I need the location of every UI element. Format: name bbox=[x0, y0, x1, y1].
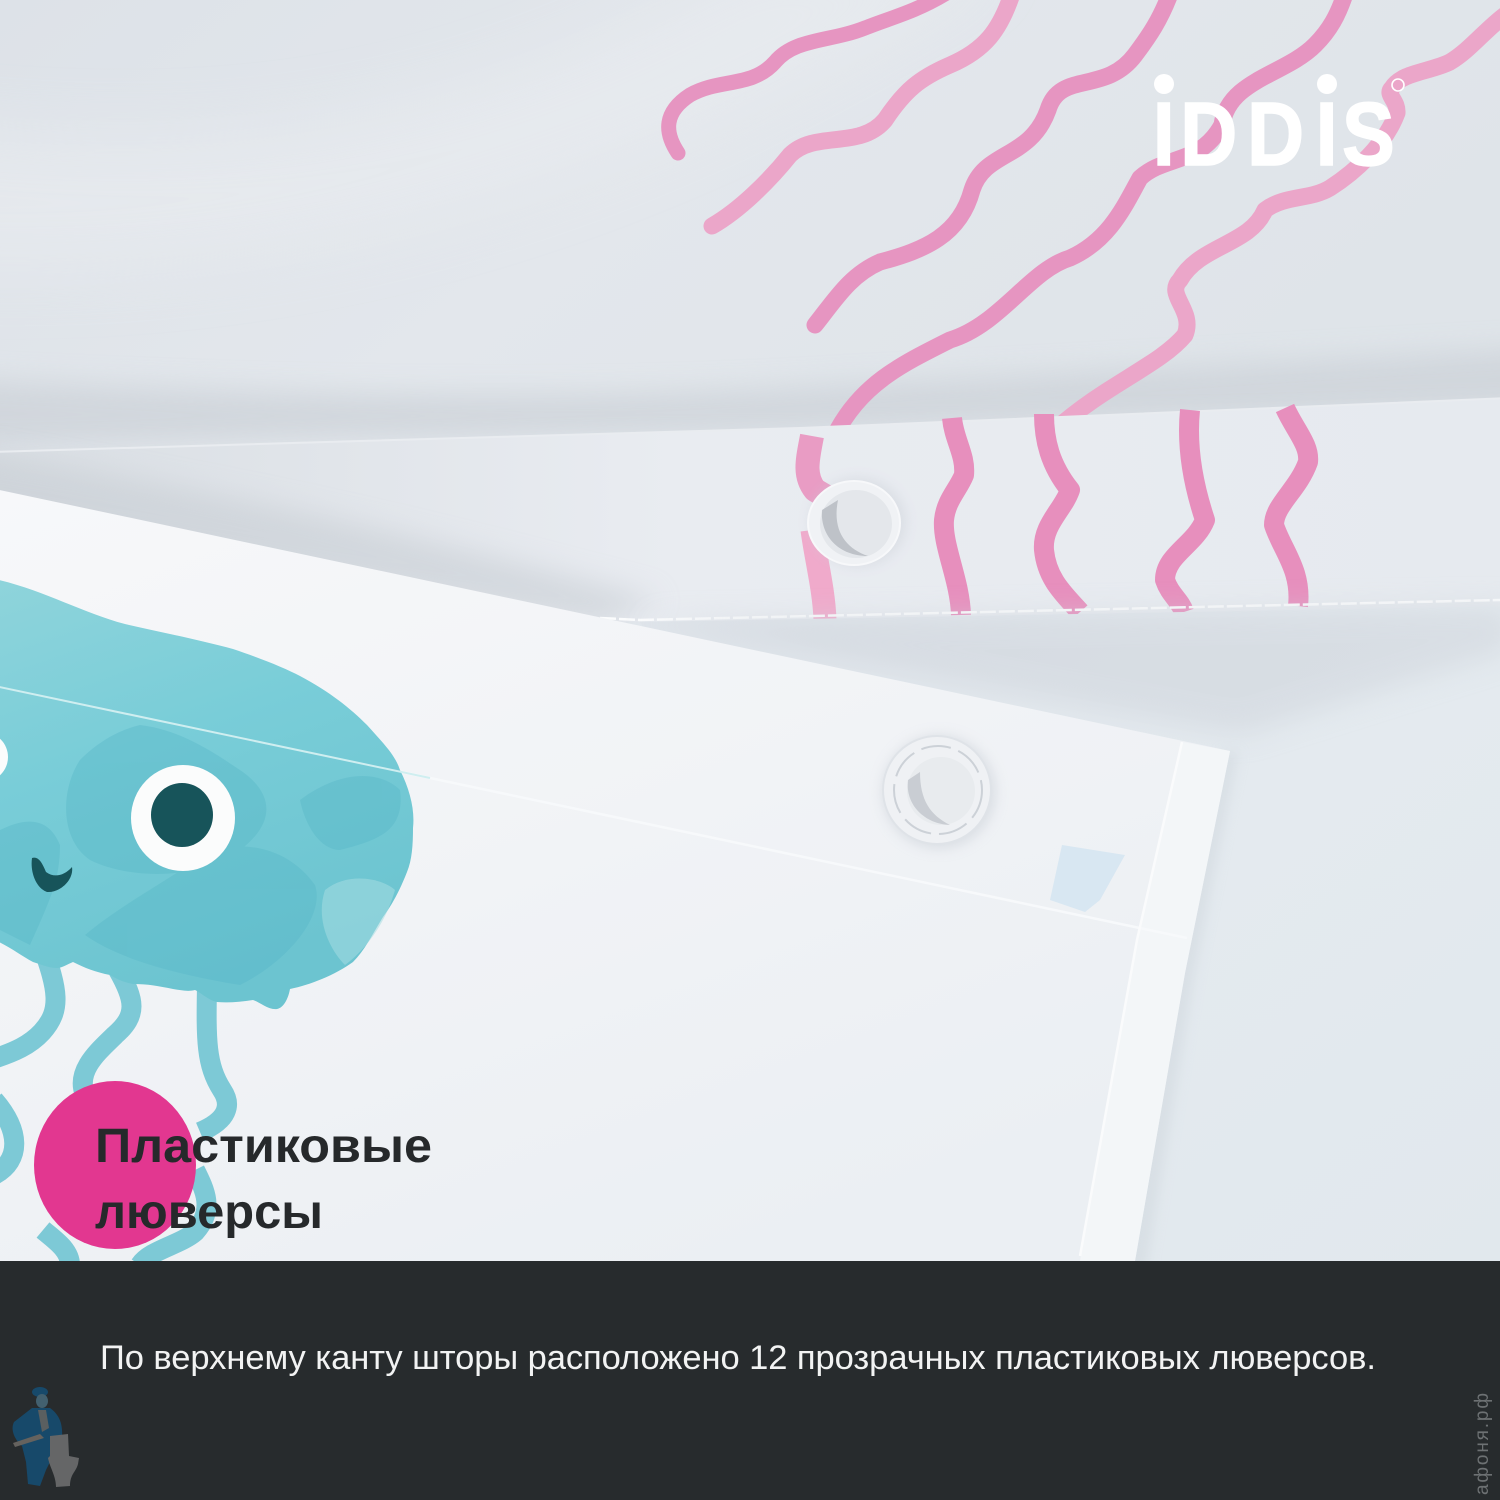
watermark: афоня.рф bbox=[1472, 1393, 1493, 1495]
panel: front flap bbox=[0, 488, 1238, 1270]
heading: Пластиковые bbox=[95, 1120, 432, 1173]
jellyfish bell shading bbox=[0, 725, 401, 985]
hem stitch over jellyfish bbox=[0, 685, 430, 778]
toilet bbox=[48, 1434, 79, 1487]
pink stripes on hem strip bbox=[807, 408, 1308, 620]
grommet: lower bbox=[882, 735, 996, 849]
panel: top hem strip bbox=[0, 398, 1500, 625]
jellyfish left eye bbox=[0, 733, 8, 781]
panel: lower fabric under flap bbox=[640, 606, 1500, 1261]
stitch line on hem strip bbox=[600, 600, 1500, 620]
jellyfish smile bbox=[32, 858, 72, 892]
jellyfish eye bbox=[131, 765, 235, 871]
heading bbox=[95, 1120, 432, 1239]
heading: люверсы bbox=[95, 1186, 323, 1239]
jellyfish illustration bbox=[0, 578, 430, 1265]
jellyfish right pale patch bbox=[322, 878, 395, 965]
grommet: upper bbox=[808, 478, 906, 566]
panel: upper fabric bbox=[0, 0, 1500, 470]
jellyfish bell bbox=[0, 578, 413, 1009]
accent circle bbox=[34, 1081, 196, 1249]
logo: iddis: IDDIS bbox=[1153, 83, 1395, 184]
plumber face bbox=[36, 1394, 48, 1408]
footer bar bbox=[0, 1261, 1500, 1500]
wrench bbox=[13, 1434, 44, 1447]
plumber shirt bbox=[38, 1410, 49, 1432]
description text: По верхнему канту шторы расположено 12 прозрачных пластиковых люверсов. bbox=[100, 1339, 1376, 1377]
icon: plumber with toilet bbox=[13, 1387, 79, 1487]
plumber figure bbox=[13, 1387, 62, 1486]
jellyfish tentacles bbox=[0, 945, 227, 1265]
pink wavy lines on upper fabric bbox=[669, 0, 1500, 435]
